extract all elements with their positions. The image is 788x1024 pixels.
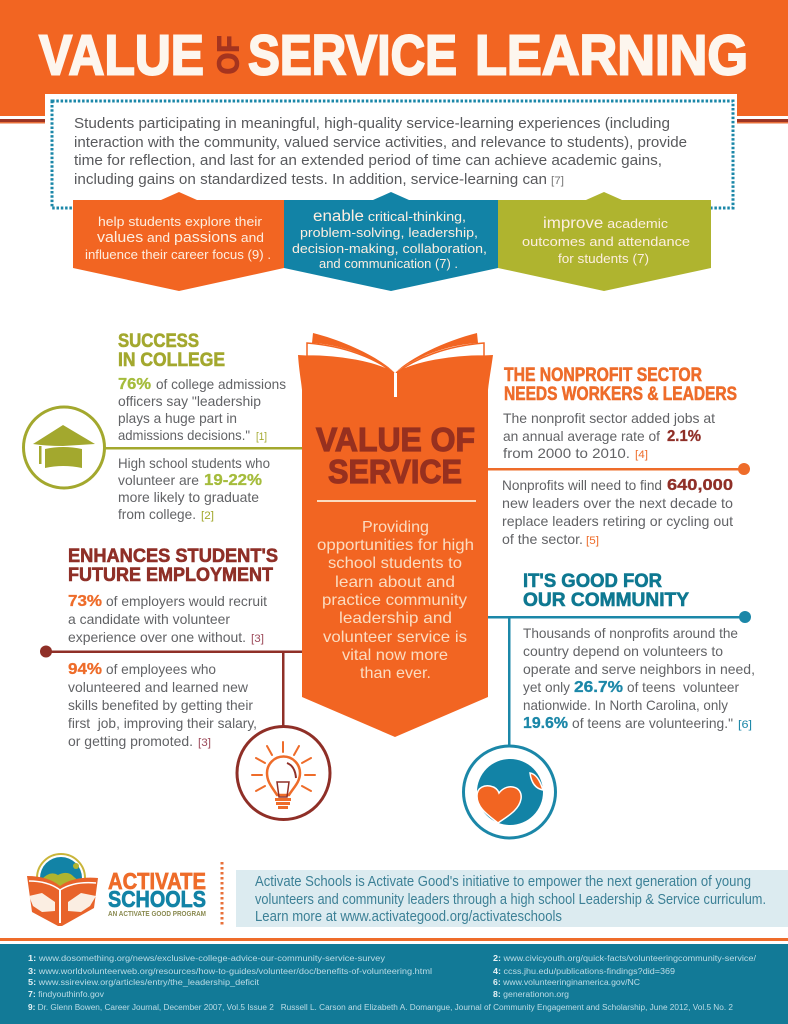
text: 73 percent: a candidate with volunteer — [68, 611, 230, 627]
heading — [523, 571, 689, 611]
text: 94 percent: 94% — [68, 661, 102, 678]
footer: sources: 3: www.worldvolunteerweb.org/resources/how-to-guides/volunteer/doc/benefits-of-volunteering.html — [28, 967, 432, 976]
intro text: Students participating in meaningful, high-quality service-learning experiences (including — [74, 115, 670, 132]
text: job growth: The nonprofit sector added jobs at — [503, 410, 715, 426]
ribbon: improve outcomes: improve academic — [543, 215, 669, 232]
text: teens volunteering: 26.7% — [574, 679, 623, 696]
text: 76 percent: plays a huge part in — [118, 410, 237, 426]
text: graduation: from college. — [118, 506, 196, 522]
intro text — [74, 115, 687, 188]
connector: nonprofit sector — [487, 468, 745, 470]
book text — [317, 519, 474, 682]
text: new leaders — [502, 477, 733, 547]
text: 76 percent: of college admissions — [156, 376, 286, 392]
book text: vital now more — [342, 647, 448, 664]
ribbon: improve outcomes: for students (7) — [558, 251, 649, 266]
text: job growth: from 2000 to 2010. — [503, 445, 630, 461]
book heading: SERVICE — [328, 453, 462, 490]
book heading — [316, 421, 475, 490]
icon: book pages — [307, 333, 484, 373]
text: graduation: volunteer are — [118, 472, 199, 488]
heading: NEEDS WORKERS & LEADERS — [504, 384, 737, 405]
ribbon: critical thinking: enable critical-thinking, — [313, 208, 466, 225]
central book panel — [298, 333, 493, 737]
intro text: interaction with the community, valued service activities, and relevance to students), provide — [74, 134, 687, 151]
text: 76 percent: 76% — [118, 376, 151, 393]
book text: volunteer service is — [323, 629, 467, 646]
text: 94 percent: of employees who — [106, 661, 216, 677]
footer: sources: 6: www.volunteeringinamerica.gov/NC — [493, 978, 640, 987]
ribbon: critical thinking — [284, 192, 498, 291]
ribbon: explore values: values and passions and — [97, 229, 264, 246]
heading — [68, 546, 278, 586]
ribbon: critical thinking: problem-solving, leadership, — [300, 225, 478, 240]
text: new leaders: new leaders over the next decade to — [502, 495, 733, 511]
title: SERVICE — [248, 24, 457, 88]
text: 94 percent: skills benefited by getting their — [68, 697, 253, 713]
text: new leaders: [5] — [586, 535, 599, 547]
text: teens volunteering — [523, 625, 755, 732]
text: graduation: 19-22% — [204, 472, 262, 489]
text: job growth: [4] — [635, 449, 648, 461]
text: 76 percent — [118, 376, 286, 443]
text: teens volunteering: country depend on volunteers to — [523, 643, 723, 659]
heading — [118, 331, 225, 371]
book cover body — [298, 355, 493, 737]
header banner — [0, 0, 788, 124]
ribbon: explore values: influence their career focus (9) . — [85, 247, 271, 262]
text: 94 percent: [3] — [198, 737, 211, 749]
book text: opportunities for high — [317, 537, 474, 554]
book heading: VALUE OF — [316, 421, 475, 458]
panel: success in college — [24, 331, 286, 522]
text: graduation: [2] — [201, 510, 214, 522]
footer: sources: 5: www.ssireview.org/articles/entry/the_leadership_deficit — [28, 978, 260, 987]
panel: community — [464, 571, 755, 838]
dotted divider — [220, 862, 224, 925]
text: 94 percent: or getting promoted. — [68, 733, 193, 749]
heading: IN COLLEGE — [118, 350, 225, 371]
icon: graduation cap — [24, 407, 104, 488]
footer: sources: 8: generationon.org — [493, 990, 569, 999]
panel: nonprofit sector — [502, 365, 737, 547]
book text: practice community — [322, 592, 467, 609]
footer: sources — [0, 944, 788, 1024]
text: 73 percent: experience over one without. — [68, 629, 246, 645]
title: LEARNING — [475, 24, 748, 88]
ribbon: explore values: help students explore their — [98, 214, 263, 229]
book text: learn about and — [335, 574, 455, 591]
text: teens volunteering: Thousands of nonprofits around the — [523, 625, 738, 641]
heading: FUTURE EMPLOYMENT — [68, 565, 273, 586]
wordmark: AN ACTIVATE GOOD PROGRAM — [108, 911, 206, 918]
heading: IT'S GOOD FOR — [523, 571, 662, 592]
icon: lightbulb — [237, 726, 330, 820]
text: job growth: an annual average rate of — [503, 428, 660, 444]
text: teens volunteering: 19.6% — [523, 715, 568, 732]
panel: about Activate Schools — [236, 870, 788, 927]
title: VALUE — [39, 24, 204, 88]
book text: school students to — [328, 555, 462, 572]
heading: THE NONPROFIT SECTOR — [504, 365, 702, 386]
text: job growth: 2.1% — [667, 428, 701, 445]
intro text: [7] — [551, 175, 564, 187]
text: graduation: High school students who — [118, 455, 270, 471]
icon: book with globe and hands — [27, 854, 98, 926]
footer: sources: 2: www.civicyouth.org/quick-facts/volunteeringcommunity-service/ — [493, 954, 757, 963]
ribbon: explore values — [73, 192, 284, 291]
footer: sources: 4: ccss.jhu.edu/publications-findings?did=369 — [493, 967, 676, 976]
wordmark: ACTIVATE — [108, 868, 206, 894]
book text: leadership and — [339, 610, 452, 627]
book text: Providing — [362, 519, 429, 536]
text: teens volunteering: of teens volunteer — [627, 679, 739, 695]
panel: student employment — [68, 546, 330, 820]
text: 76 percent: admissions decisions." — [118, 427, 250, 443]
heading: OUR COMMUNITY — [523, 590, 689, 611]
ribbon: critical thinking: and communication (7) . — [319, 256, 458, 271]
text: 73 percent: of employers would recruit — [106, 593, 267, 609]
text: 73 percent: 73% — [68, 593, 102, 610]
text: teens volunteering: of teens are volunteering." — [572, 715, 733, 731]
intro text: time for reflection, and last for an extended period of time can achieve academic gains, — [74, 152, 662, 169]
text: 94 percent: volunteered and learned new — [68, 679, 249, 695]
connector: success in college — [105, 447, 303, 450]
connector: community — [487, 611, 751, 745]
intro panel — [45, 94, 737, 210]
footer stripe — [0, 938, 788, 941]
text: graduation — [118, 455, 270, 522]
heading — [504, 365, 737, 405]
heading: SUCCESS — [118, 331, 199, 352]
book text: than ever. — [360, 665, 431, 682]
text: teens volunteering: operate and serve neighbors in need, — [523, 661, 755, 677]
text: new leaders: Nonprofits will need to find — [502, 477, 662, 493]
text: 76 percent: officers say "leadership — [118, 393, 261, 409]
title — [39, 24, 748, 88]
text: teens volunteering: [6] — [738, 719, 752, 731]
title: OF — [210, 36, 246, 74]
text: new leaders: of the sector. — [502, 531, 583, 547]
text: new leaders: replace leaders retiring or cycling out — [502, 513, 733, 529]
text: teens volunteering: nationwide. In North Carolina, only — [523, 697, 728, 713]
text: teens volunteering: yet only — [523, 679, 570, 695]
wordmark — [108, 868, 206, 918]
ribbon: critical thinking: decision-making, collaboration, — [292, 241, 487, 256]
text: 94 percent — [68, 661, 257, 749]
ribbon: improve outcomes — [498, 192, 711, 291]
text: 76 percent: [1] — [256, 431, 267, 443]
text: 94 percent: first job, improving their salary, — [68, 715, 257, 731]
footer: sources: 9: Dr. Glenn Bowen, Career Journal, December 2007, Vol.5 Issue 2 Russell L. Carson and Elizabeth A. Domangue, Journal of Community Engagement and Scholarship, June 2012, Vol.5 No. 2 — [28, 1003, 734, 1012]
heading: ENHANCES STUDENT'S — [68, 546, 278, 567]
text: new leaders: 640,000 — [667, 477, 733, 494]
footer: sources: 1: www.dosomething.org/news/exclusive-college-advice-our-community-service-survey — [28, 954, 385, 963]
intro text: including gains on standardized tests. In addition, service-learning can — [74, 171, 547, 188]
ribbon: improve outcomes: outcomes and attendance — [522, 234, 690, 249]
wordmark: SCHOOLS — [108, 886, 206, 912]
logo: Activate Schools — [27, 854, 206, 926]
footer: sources: 7: findyouthinfo.gov — [28, 990, 104, 999]
text: job growth — [503, 410, 715, 461]
text: graduation: more likely to graduate — [118, 489, 259, 505]
panel: about Activate Schools: Learn more at www.activategood.org/activateschools — [255, 909, 562, 925]
text: 73 percent — [68, 593, 267, 645]
text: 73 percent: [3] — [251, 633, 264, 645]
connector: student employment — [40, 646, 303, 727]
icon: globe with heart — [464, 746, 556, 838]
dot: nonprofit connector end — [738, 463, 750, 475]
